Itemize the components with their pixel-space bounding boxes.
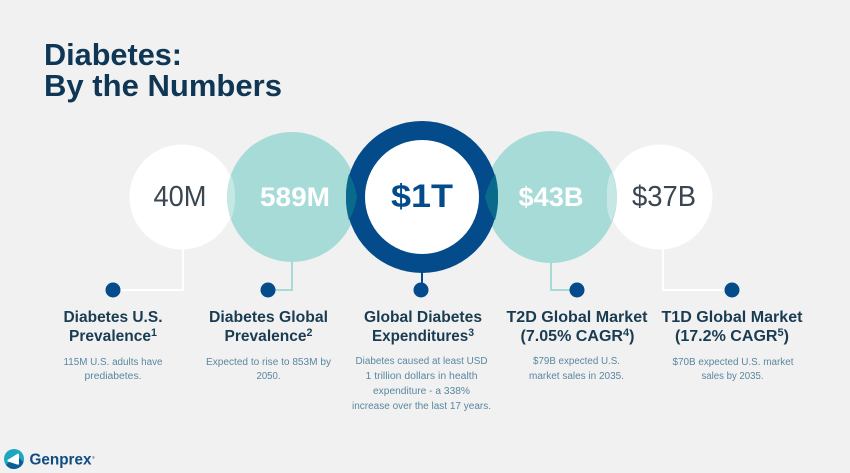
column: T1D Global Market [662, 309, 803, 382]
column: T1D Global Market: $70B expected U.S. market [672, 357, 794, 368]
column: Global Diabetes Expenditures: Diabetes caused at least USD [356, 356, 488, 367]
circle: 1T ring [346, 130, 498, 264]
column: Diabetes U.S. Prevalence: prediabetes. [84, 371, 142, 382]
circle: 37B [608, 144, 712, 250]
column: T1D Global Market: sales by 2035. [702, 371, 764, 382]
circle: 40M: 40M [154, 181, 206, 213]
connector lines [113, 249, 732, 290]
column: T1D Global Market: T1D Global Market [662, 309, 803, 326]
column: T2D Global Market: T2D Global Market [506, 309, 648, 326]
column: Diabetes Global Prevalence [206, 309, 331, 382]
column: Global Diabetes Expenditures: expenditure - a 338% [373, 386, 470, 397]
column: T2D Global Market [506, 309, 648, 382]
title: Diabetes: [44, 37, 182, 72]
logo: Genprex: Genprex [30, 452, 92, 468]
column: T2D Global Market: ) [629, 328, 634, 345]
column: Global Diabetes Expenditures: 1 trillion dollars in health [366, 371, 478, 382]
circle: 43B: $43B [518, 182, 584, 212]
column: Diabetes Global Prevalence: Diabetes Global [209, 309, 328, 326]
column: Diabetes U.S. Prevalence: 1 [151, 327, 157, 339]
circle: 37B: $37B [632, 181, 696, 213]
column: T2D Global Market: 4 [623, 327, 630, 339]
column: T2D Global Market: market sales in 2035. [529, 371, 624, 382]
circle: 40M [130, 144, 234, 250]
column: T2D Global Market: (7.05% CAGR [520, 328, 623, 345]
title: By the Numbers [44, 68, 282, 103]
column: Diabetes Global Prevalence: Expected to rise to 853M by [206, 357, 331, 368]
column: Diabetes Global Prevalence: 2 [307, 327, 312, 339]
column: Diabetes U.S. Prevalence: 115M U.S. adults have [64, 357, 163, 368]
logo: Genprex: ® [92, 455, 95, 460]
column: T1D Global Market: (17.2% CAGR [675, 328, 777, 345]
column: Diabetes U.S. Prevalence [64, 309, 163, 382]
circle: 589M [227, 132, 357, 262]
circle: 1T ring: $1T [391, 178, 454, 214]
circle: 43B [485, 131, 617, 263]
column: T1D Global Market: 5 [778, 327, 784, 339]
marker dots [106, 282, 740, 298]
icon: logo mark [4, 449, 24, 469]
title [44, 37, 282, 103]
circle: 589M: 589M [260, 182, 330, 212]
column: Global Diabetes Expenditures: 3 [468, 327, 474, 339]
column: Global Diabetes Expenditures: increase over the last 17 years. [352, 401, 491, 412]
column: T2D Global Market: $79B expected U.S. [533, 356, 620, 367]
column: Global Diabetes Expenditures: Global Diabetes [364, 309, 482, 326]
column: Global Diabetes Expenditures: Expenditures [372, 328, 473, 345]
column: Diabetes U.S. Prevalence: Diabetes U.S. [64, 309, 162, 326]
column: Diabetes U.S. Prevalence: Prevalence [69, 328, 154, 345]
column: Diabetes Global Prevalence: 2050. [256, 371, 280, 382]
column: Global Diabetes Expenditures [352, 309, 491, 412]
column: T1D Global Market: ) [784, 328, 789, 345]
column: Diabetes Global Prevalence: Prevalence [224, 328, 309, 345]
logo: Genprex [4, 449, 95, 469]
